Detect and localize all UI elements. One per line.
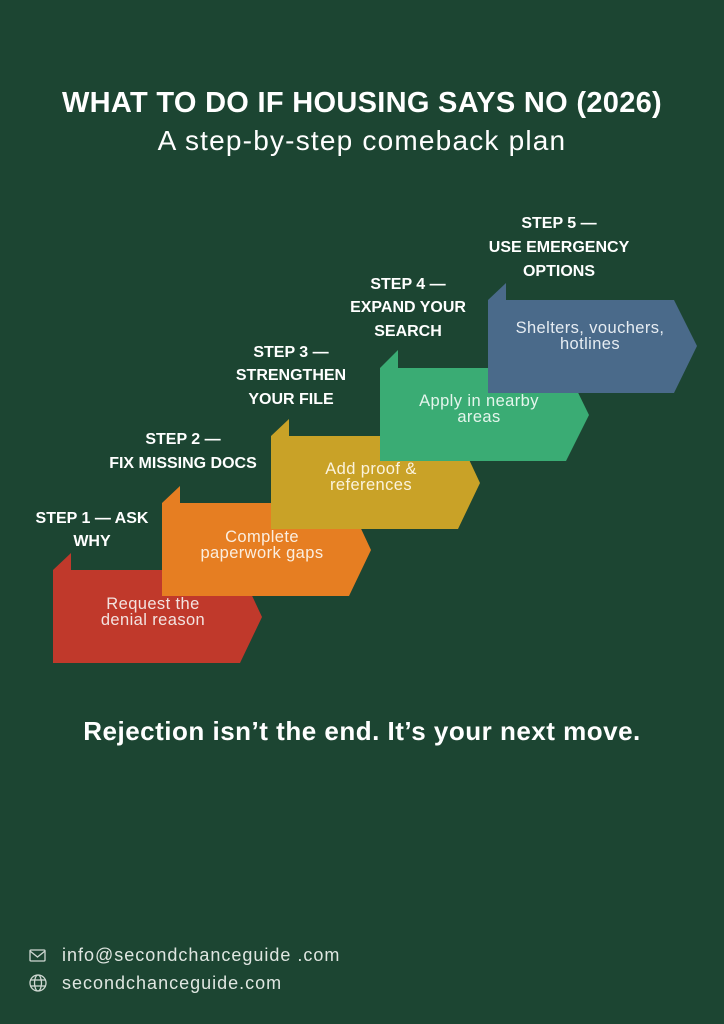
contact website: secondchanceguide.com (62, 973, 282, 993)
step 3: STEP 3 — (253, 344, 329, 361)
step 4: EXPAND YOUR (350, 299, 466, 316)
step 4: STEP 4 — (370, 276, 446, 293)
step 1: denial reason (101, 611, 205, 629)
step 3: YOUR FILE (248, 391, 334, 408)
step 4: Apply in nearby (419, 392, 539, 410)
step 3 (236, 344, 480, 529)
title: WHAT TO DO IF HOUSING SAYS NO (2026) (62, 87, 662, 119)
step 2: STEP 2 — (145, 431, 221, 448)
step 5: Shelters, vouchers, (516, 319, 664, 337)
icon: globe (30, 975, 46, 991)
step 1 (36, 510, 262, 663)
step 1: WHY (73, 533, 111, 550)
icon: email (30, 950, 45, 961)
step 3: Add proof & (325, 460, 417, 478)
step 4: areas (457, 408, 501, 426)
step 3: STRENGTHEN (236, 367, 346, 384)
step 5: OPTIONS (523, 263, 595, 280)
step 4 (350, 276, 589, 461)
step 5: STEP 5 — (521, 215, 597, 232)
step 5 (488, 215, 697, 393)
contact email: info@secondchanceguide .com (62, 945, 340, 965)
step 4: SEARCH (374, 323, 442, 340)
tagline: Rejection isn’t the end. It’s your next move. (83, 716, 641, 746)
step 2: paperwork gaps (200, 544, 324, 562)
step 1: STEP 1 — ASK (36, 510, 149, 527)
subtitle: A step-by-step comeback plan (158, 125, 566, 156)
step 5: USE EMERGENCY (489, 239, 630, 256)
step 3: references (330, 476, 412, 494)
step 2: FIX MISSING DOCS (109, 455, 257, 472)
step 5: hotlines (560, 335, 620, 353)
step 1: Request the (106, 595, 200, 613)
step 2 (109, 431, 371, 596)
step 2: Complete (225, 528, 299, 546)
